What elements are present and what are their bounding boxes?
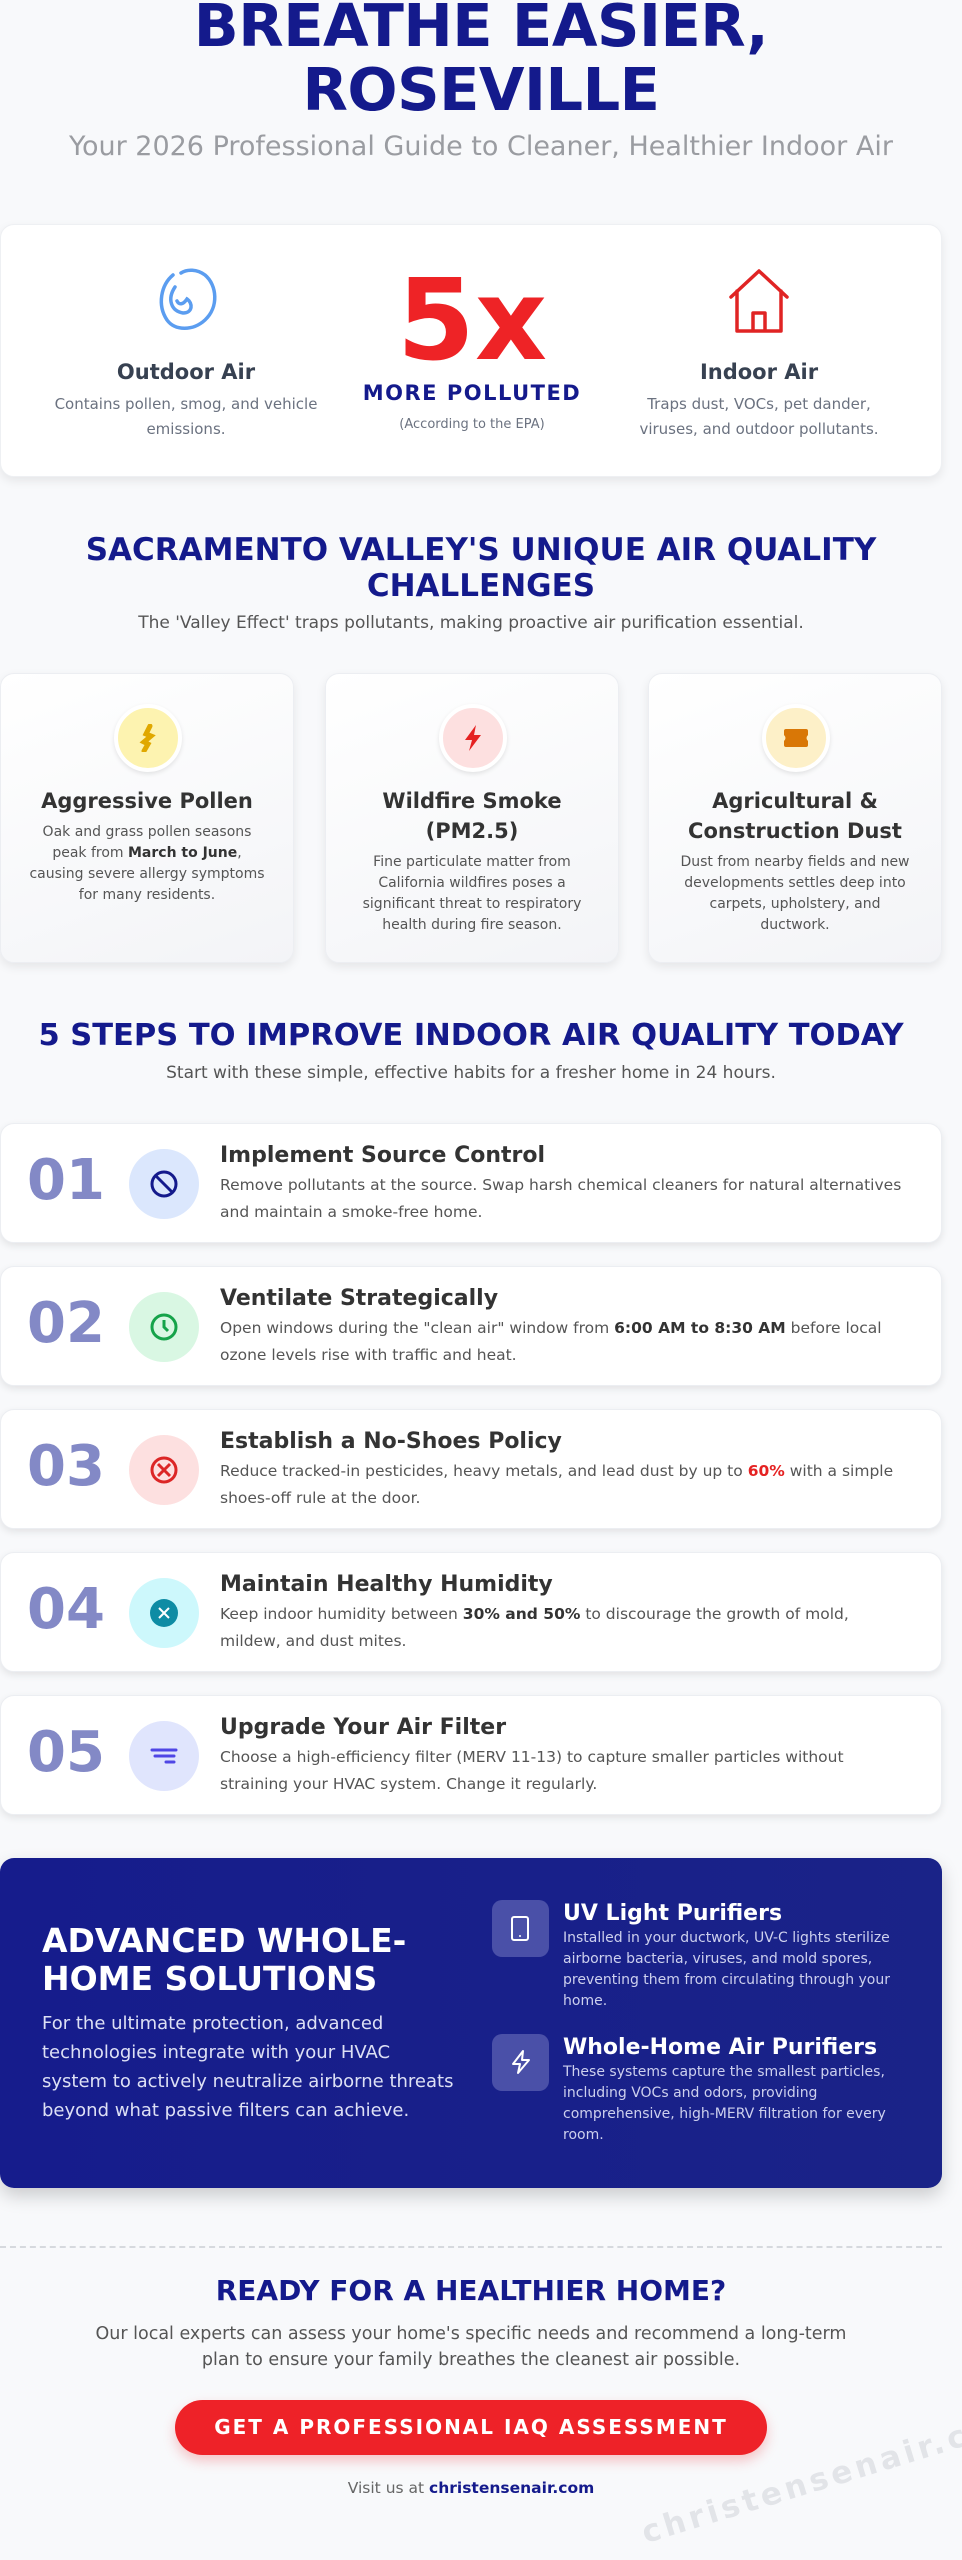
panel: aggressive pollen: peak from March to June, — [52, 845, 242, 861]
step 03: Establish a No-Shoes Policy — [220, 1429, 562, 1454]
step 05: Choose a high-efficiency filter (MERV 11-13) to capture smaller particles without straining your HVAC system. Change it regularly. — [220, 1748, 844, 1793]
heading: 5 steps: 5 STEPS TO IMPROVE INDOOR AIR QUALITY TODAY — [38, 1018, 904, 1053]
whole-home text: These systems capture the smallest particles, including VOCs and odors, providing comprehensive, high-MERV filtration for every room. — [563, 2064, 886, 2143]
button — [175, 2400, 767, 2455]
step 02 — [0, 1266, 942, 1386]
paragraph: beyond what passive filters can achieve. — [42, 2100, 409, 2121]
heading: advanced: HOME SOLUTIONS — [42, 1959, 377, 1998]
subheading: Start with these simple, effective habits for a fresher home in 24 hours. — [166, 1063, 776, 1083]
panel: aggressive pollen — [0, 673, 294, 963]
panel: advanced solutions — [0, 1858, 942, 2188]
stat: 5x: 5x — [397, 256, 547, 386]
outdoor air text: Outdoor Air — [117, 360, 255, 384]
panel: aggressive pollen: for many residents. — [79, 887, 215, 903]
panel: wildfire smoke: Wildfire Smoke — [382, 789, 562, 813]
paragraph: For the ultimate protection, advanced — [42, 2013, 383, 2034]
icon: x circle — [129, 1435, 199, 1505]
step 01: Remove pollutants at the source. Swap harsh chemical cleaners for natural alternatives and maintain a smoke-free home. — [220, 1176, 901, 1221]
step 04 — [0, 1552, 942, 1672]
icon: outdoor air swirl — [160, 268, 216, 330]
step 02: 02 — [27, 1291, 105, 1356]
step 04: Keep indoor humidity between 30% and 50% to discourage the growth of mold, mildew, and dust mites. — [220, 1605, 849, 1650]
step 05: Upgrade Your Air Filter — [220, 1715, 506, 1740]
icon: pollen — [114, 704, 182, 772]
heading: advanced — [42, 1921, 406, 1998]
icon: filter lines — [129, 1721, 199, 1791]
panel: aggressive pollen: causing severe allergy symptoms — [29, 866, 265, 882]
step 03: Reduce tracked-in pesticides, heavy metals, and lead dust by up to 60% with a simple shoes-off rule at the door. — [220, 1462, 893, 1507]
step 05 — [0, 1695, 942, 1815]
title — [194, 0, 768, 124]
indoor air text — [639, 360, 879, 438]
panel: aggressive pollen: Aggressive Pollen — [41, 789, 253, 813]
heading: valley challenges: SACRAMENTO VALLEY'S UNIQUE AIR QUALITY — [86, 532, 876, 568]
paragraph: system to actively neutralize airborne threats — [42, 2071, 453, 2092]
step 01: 01 — [27, 1148, 105, 1213]
whole-home text: Whole-Home Air Purifiers — [563, 2035, 877, 2060]
step 02: Open windows during the "clean air" window from 6:00 AM to 8:30 AM before local ozone levels rise with traffic and heat. — [220, 1319, 882, 1364]
panel: agricultural dust: Agricultural & — [712, 789, 878, 813]
outdoor air text — [55, 360, 317, 438]
step 05: 05 — [27, 1720, 105, 1785]
icon: dust block — [762, 704, 830, 772]
website: Visit us at christensenair.com — [348, 2479, 594, 2497]
panel: aggressive pollen: Oak and grass pollen seasons — [43, 824, 251, 840]
icon: house — [729, 269, 789, 333]
panel: agricultural dust: Construction Dust — [688, 819, 902, 843]
subtitle: Your 2026 Professional Guide to Cleaner, Healthier Indoor Air — [69, 131, 893, 162]
paragraph: technologies integrate with your HVAC — [42, 2042, 390, 2063]
icon: ban — [129, 1149, 199, 1219]
icon: lightning — [439, 704, 507, 772]
icon: clock — [129, 1292, 199, 1362]
subheading: The 'Valley Effect' traps pollutants, making proactive air purification essential. — [138, 613, 804, 633]
indoor air text: Indoor Air — [700, 360, 818, 384]
icon: bolt — [492, 2034, 549, 2091]
heading: valley challenges: CHALLENGES — [367, 568, 595, 604]
indoor air text: Traps dust, VOCs, pet dander, viruses, and outdoor pollutants. — [639, 395, 879, 438]
button: GET A PROFESSIONAL IAQ ASSESSMENT — [214, 2415, 728, 2439]
heading: cta: READY FOR A HEALTHIER HOME? — [216, 2274, 726, 2307]
panel: wildfire smoke: (PM2.5) — [426, 819, 518, 843]
panel: wildfire smoke — [325, 673, 619, 963]
stat: 5x: MORE POLLUTED — [363, 381, 581, 405]
heading: valley challenges — [86, 532, 877, 604]
uv light text: UV Light Purifiers — [563, 1901, 782, 1926]
heading: advanced: ADVANCED WHOLE- — [42, 1921, 406, 1960]
step 03 — [0, 1409, 942, 1529]
panel: agricultural dust — [648, 673, 942, 963]
step 03: 03 — [27, 1434, 105, 1499]
step 01: Implement Source Control — [220, 1143, 545, 1168]
panel: agricultural dust: Dust from nearby fields and new developments settles deep into carpets, upholstery, and ductwork. — [680, 854, 910, 933]
stat: 5x — [363, 256, 581, 432]
panel: outdoor vs indoor stat — [0, 224, 942, 477]
title: ROSEVILLE — [302, 55, 660, 124]
step 04: 04 — [27, 1577, 105, 1642]
icon: uv tablet — [492, 1900, 549, 1957]
step 02: Ventilate Strategically — [220, 1286, 498, 1311]
uv light text: Installed in your ductwork, UV-C lights sterilize airborne bacteria, viruses, and mold spores, preventing them from circulating through your home. — [563, 1930, 890, 2009]
outdoor air text: Contains pollen, smog, and vehicle emissions. — [55, 395, 317, 438]
panel: wildfire smoke: Fine particulate matter from California wildfires poses a significant threat to respiratory health during fire season. — [363, 854, 581, 933]
icon: humidity — [129, 1578, 199, 1648]
cta paragraph: plan to ensure your family breathes the cleanest air possible. — [202, 2350, 740, 2370]
paragraph — [42, 2013, 453, 2121]
cta paragraph — [96, 2324, 846, 2370]
stat: 5x: (According to the EPA) — [399, 417, 545, 432]
step 04: Maintain Healthy Humidity — [220, 1572, 553, 1597]
cta paragraph: Our local experts can assess your home's specific needs and recommend a long-term — [96, 2324, 846, 2344]
step 01 — [0, 1123, 942, 1243]
